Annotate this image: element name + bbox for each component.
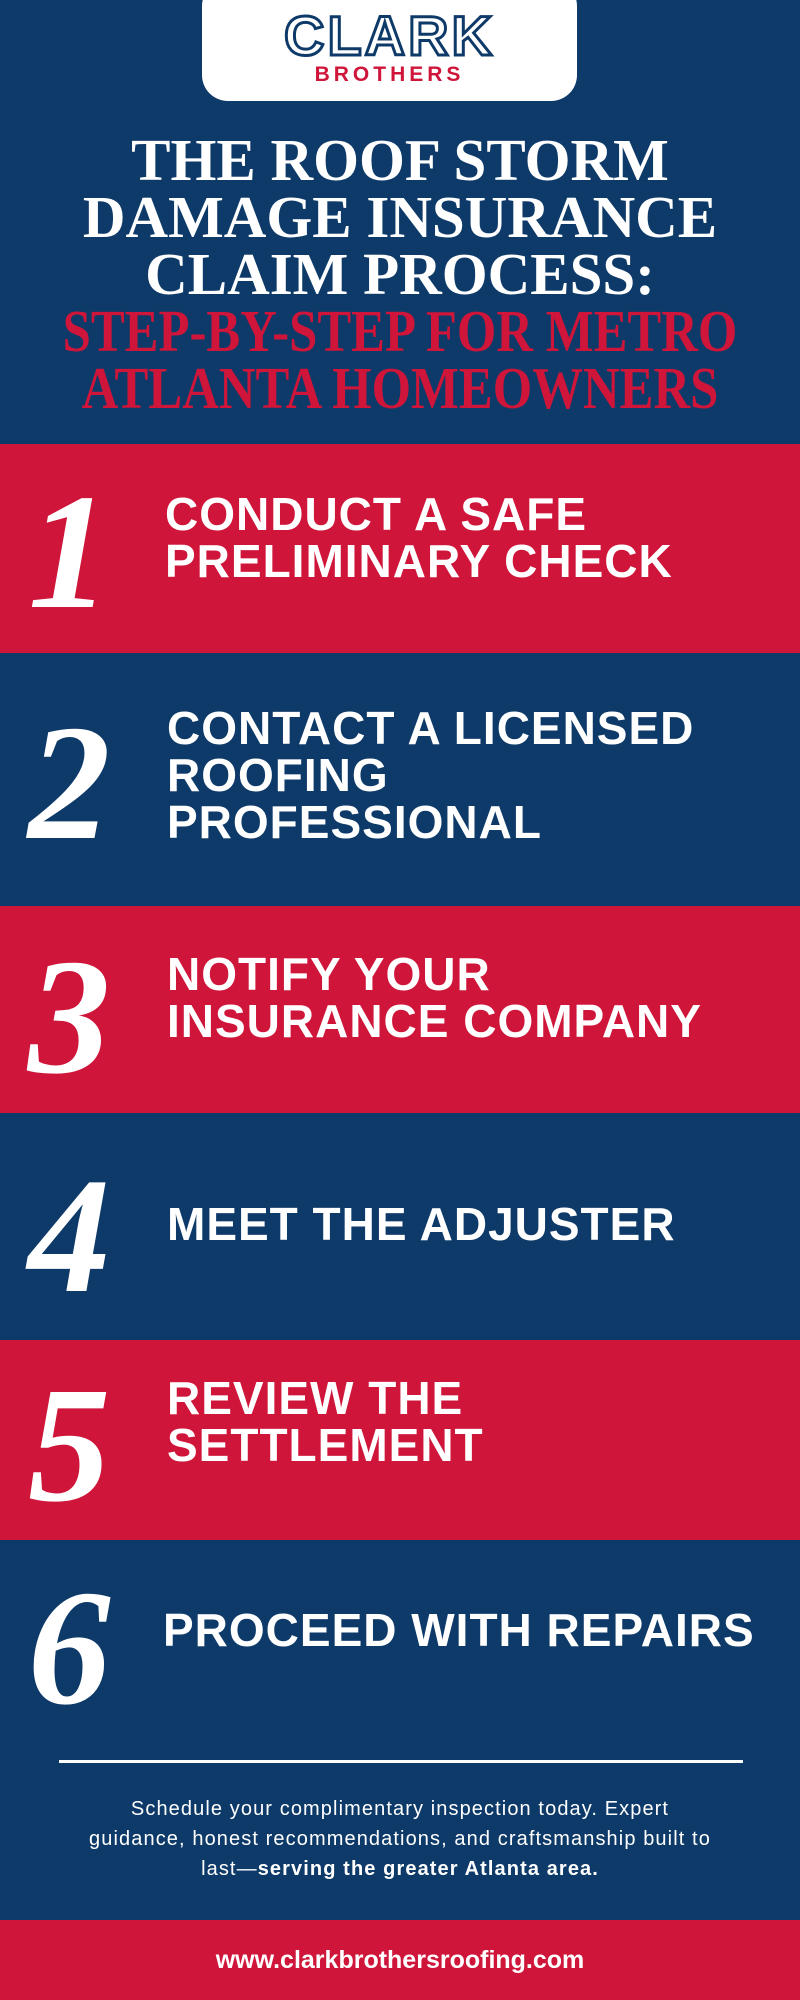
logo wordmark: CLARK	[284, 4, 495, 67]
title: DAMAGE INSURANCE	[83, 184, 717, 250]
step 6 panel	[0, 1540, 800, 1740]
step 3 panel: 3	[28, 925, 110, 1108]
closing text: last—serving the greater Atlanta area.	[201, 1858, 599, 1880]
title: STEP-BY-STEP FOR METRO	[63, 298, 737, 364]
step 5 panel	[0, 1340, 800, 1540]
step 1 panel: PRELIMINARY CHECK	[165, 535, 673, 587]
closing text: guidance, honest recommendations, and craftsmanship built to	[89, 1828, 711, 1850]
title: ATLANTA HOMEOWNERS	[82, 355, 718, 421]
step 4 panel	[0, 1113, 800, 1340]
step 6 panel: 6	[28, 1556, 110, 1739]
step 5 panel: REVIEW THE	[167, 1372, 463, 1424]
step 5 panel: SETTLEMENT	[167, 1419, 484, 1471]
step 1 panel: CONDUCT A SAFE	[165, 488, 587, 540]
title: CLAIM PROCESS:	[145, 241, 655, 307]
step 3 panel	[0, 906, 800, 1113]
step 2 panel: CONTACT A LICENSED	[167, 702, 694, 754]
logo	[202, 0, 577, 101]
step 5 panel: 5	[28, 1353, 110, 1536]
footer url	[0, 1920, 800, 2000]
step 2 panel: 2	[28, 691, 110, 874]
title	[63, 127, 737, 421]
step 3 panel: INSURANCE COMPANY	[167, 995, 702, 1047]
title: THE ROOF STORM	[131, 127, 669, 193]
step 4 panel: 4	[28, 1144, 110, 1327]
divider line	[59, 1760, 743, 1763]
step 1 panel	[0, 444, 800, 653]
footer url: www.clarkbrothersroofing.com	[216, 1946, 584, 1974]
step 6 panel: PROCEED WITH REPAIRS	[163, 1604, 755, 1656]
step 2 panel	[0, 653, 800, 906]
step 3 panel: NOTIFY YOUR	[167, 948, 491, 1000]
step 2 panel: ROOFING	[167, 749, 389, 801]
closing text: Schedule your complimentary inspection today. Expert	[131, 1798, 669, 1820]
logo subtitle: BROTHERS	[315, 63, 464, 86]
step 2 panel: PROFESSIONAL	[167, 796, 542, 848]
step 4 panel: MEET THE ADJUSTER	[167, 1198, 676, 1250]
closing text	[89, 1798, 711, 1880]
step 1 panel: 1	[28, 460, 110, 643]
